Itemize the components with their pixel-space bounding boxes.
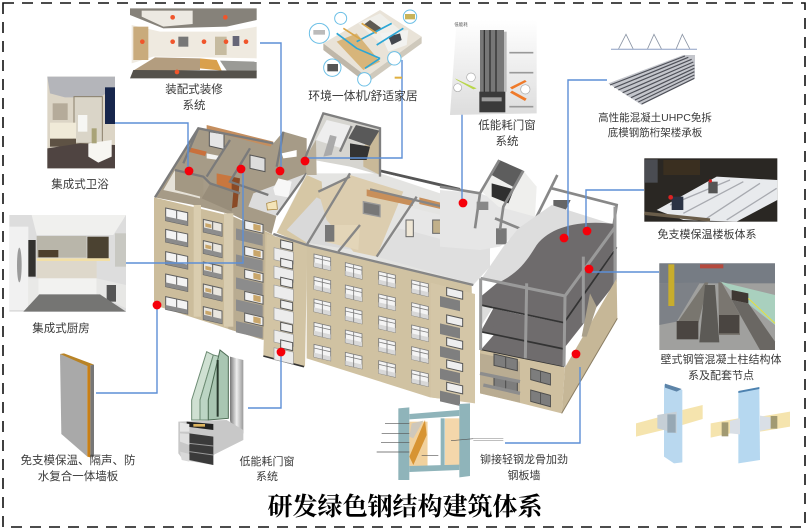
right bay facade	[431, 283, 475, 407]
panel: integrated kitchen	[9, 215, 126, 335]
label: integrated kitchen: 集成式厨房	[32, 321, 90, 335]
panel: wall-type steel tube column	[659, 263, 782, 366]
panel: riveted light steel wall	[377, 403, 568, 480]
panel: formwork-free floor	[644, 158, 777, 241]
red marker dots	[153, 157, 593, 358]
label: column system line 2: 系及配套节点	[688, 369, 754, 382]
panel: low energy window upper	[450, 20, 537, 132]
upper rooftop structures	[440, 160, 617, 250]
icon: joint left	[636, 384, 703, 463]
label: UHPC line 2: 底模钢筋桁架楼承板	[608, 126, 703, 139]
label: composite wall board line 1: 免支模保温、隔声、防	[20, 453, 136, 467]
lower brick facade	[480, 278, 617, 413]
label: formwork-free floor: 免支模保温楼板体系	[658, 227, 756, 241]
building: right concrete section	[440, 160, 617, 413]
label: low energy window lower second line: 系统	[256, 470, 278, 483]
image: kitchen photo	[9, 215, 126, 312]
label: prefabricated decoration: 装配式装修	[165, 82, 223, 96]
concrete floor slabs	[481, 205, 617, 367]
left wing facade	[154, 197, 273, 340]
image: steel plate wall	[377, 403, 503, 480]
panel: environmental all-in-one	[308, 10, 422, 103]
panel: beam column joints	[636, 384, 790, 463]
icon: joint right	[711, 387, 790, 463]
label: low energy window upper second line: 系统	[496, 135, 519, 148]
image: bathroom photo	[47, 77, 115, 168]
panel: composite wall board	[20, 353, 136, 467]
label: column system line 1: 壁式钢管混凝土柱结构体	[660, 352, 782, 366]
label: integrated bathroom: 集成式卫浴	[51, 177, 109, 191]
title: 研发绿色钢结构建筑体系	[267, 493, 543, 521]
main facade	[307, 245, 474, 403]
panel: low energy window section	[178, 350, 294, 468]
label: UHPC line 1: 高性能混凝土UHPC免拆	[598, 111, 712, 124]
image: window profile	[178, 350, 243, 465]
building: left and centre portion	[154, 113, 490, 407]
left wing open rooms	[155, 125, 307, 234]
panel: prefabricated decoration	[130, 8, 257, 96]
central bay facade	[263, 234, 307, 367]
label: low energy window lower: 低能耗门窗	[240, 454, 294, 468]
image: factory photo	[659, 263, 775, 350]
stair core	[305, 113, 380, 177]
image: wall panel section	[60, 353, 94, 457]
image: truss section	[608, 34, 697, 105]
label: prefabricated decoration second line: 系统	[182, 99, 206, 112]
image: worksite photo	[644, 158, 777, 222]
label: brochure heading: 低能耗	[454, 21, 468, 28]
image: isometric smart home	[309, 10, 422, 86]
label: low energy window upper: 低能耗门窗	[478, 118, 536, 132]
label: riveted wall line 1: 铆接轻钢龙骨加劲	[480, 452, 568, 466]
label: riveted wall line 2: 钢板墙	[508, 468, 540, 482]
label: environmental all-in-one: 环境一体机/舒适家居	[308, 89, 418, 103]
roof rooms and slabs	[273, 170, 490, 285]
panel: integrated bathroom	[47, 77, 115, 191]
label: composite wall board line 2: 水复合一体墙板	[38, 469, 119, 483]
connector lines	[96, 43, 659, 443]
image: interior cutaway	[130, 8, 257, 78]
image: window brochure	[450, 20, 537, 115]
panel: UHPC truss deck	[598, 34, 712, 124]
building: isometric steel structure model	[154, 113, 617, 413]
